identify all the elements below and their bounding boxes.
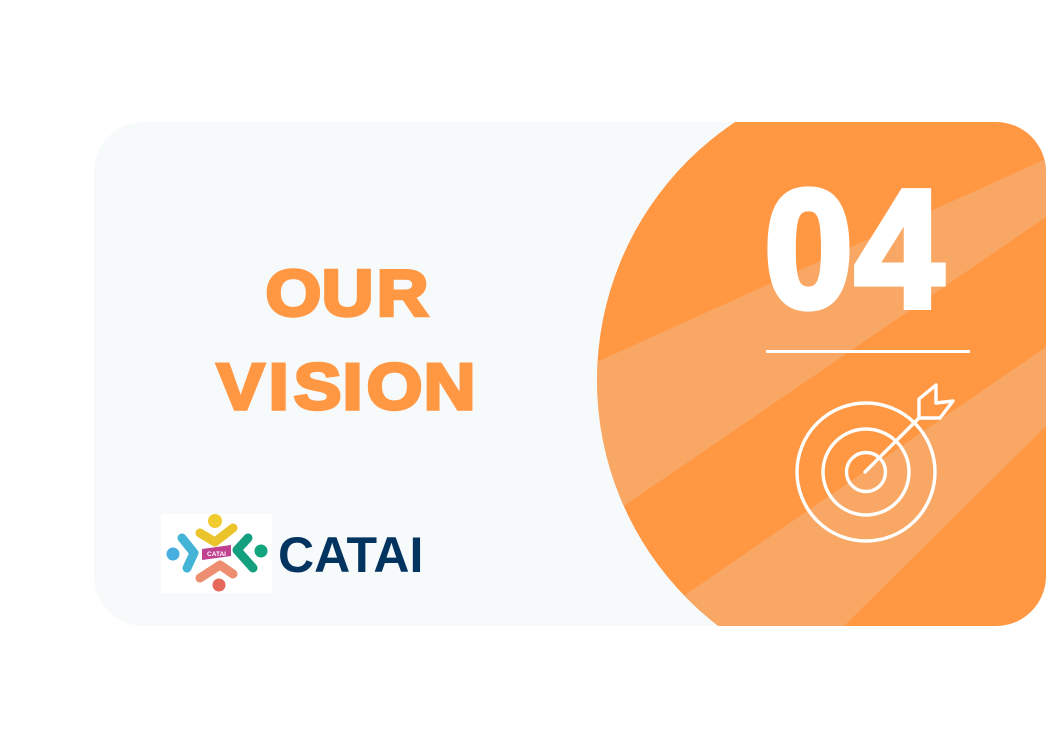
orange circle with stripes [597, 122, 1046, 626]
logo wordmark: CATAI [278, 527, 423, 583]
logo: CATAI [161, 514, 423, 593]
panel: vision card [94, 122, 1046, 626]
logo mark [161, 514, 272, 593]
icon: target with arrow [797, 385, 953, 541]
logo mark: CATAI [207, 551, 226, 558]
number 04: 04 [764, 156, 943, 342]
heading: our vision: OUR [266, 257, 428, 330]
divider line [766, 350, 970, 353]
heading: our vision: VISION [217, 351, 475, 423]
heading: our vision [217, 257, 475, 423]
